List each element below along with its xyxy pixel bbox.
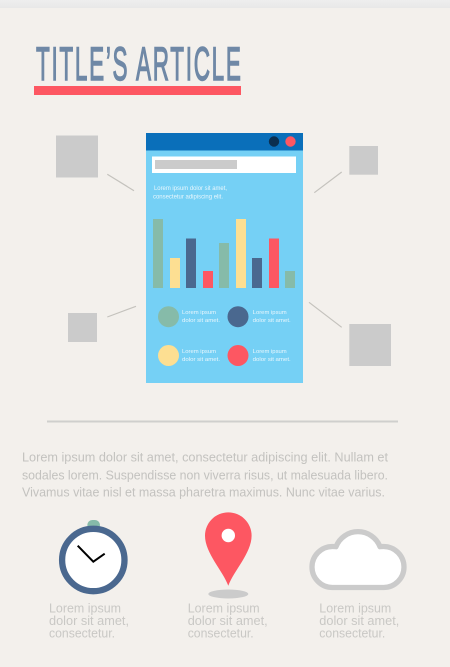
window intro text (153, 186, 227, 200)
callout: top left (56, 136, 134, 191)
caption: cloud: dolor sit amet, (319, 613, 399, 628)
callout: bottom left (68, 306, 136, 342)
legend: Lorem ipsum (182, 310, 216, 316)
legend: dolor sit amet. (253, 357, 291, 363)
icon: stopwatch (62, 520, 124, 591)
legend: Lorem ipsum (182, 349, 216, 355)
legend: dolor sit amet. (182, 357, 221, 363)
caption: map pin: consectetur. (188, 626, 254, 641)
window header bar (146, 133, 303, 150)
legend: dolor sit amet. (253, 318, 291, 324)
caption: stopwatch: Lorem ipsum (49, 601, 121, 616)
caption: map pin: dolor sit amet, (188, 613, 268, 628)
icon: map pin (205, 512, 252, 598)
caption: cloud: Lorem ipsum (319, 601, 391, 616)
legend (158, 306, 291, 366)
legend: Lorem ipsum (253, 310, 287, 316)
caption: map pin: Lorem ipsum (188, 601, 260, 616)
search field (152, 156, 296, 173)
caption: map pin (188, 601, 268, 641)
caption: cloud (319, 601, 399, 641)
caption: cloud: consectetur. (319, 626, 385, 641)
window intro text: Lorem ipsum dolor sit amet, (154, 186, 227, 192)
body paragraph: Lorem ipsum dolor sit amet, consectetur adipiscing elit. Nullam et (22, 450, 388, 465)
legend: Lorem ipsum (253, 349, 287, 355)
caption: stopwatch (49, 601, 129, 641)
window intro text: consectetur adipiscing elit. (153, 194, 223, 200)
body paragraph: Vivamus vitae nisl et massa pharetra maximus. Nunc vitae varius. (22, 485, 385, 500)
callout: top right (314, 146, 378, 193)
body paragraph: sodales lorem. Suspendisse non viverra risus, ut malesuada libero. (22, 467, 388, 482)
panel: app window mockup (146, 133, 303, 383)
body paragraph (22, 450, 388, 500)
callout: bottom right (309, 302, 391, 366)
title: TITLE’S ARTICLE (36, 38, 241, 90)
icon: cloud (312, 532, 404, 588)
legend: dolor sit amet. (182, 318, 221, 324)
caption: stopwatch: consectetur. (49, 626, 115, 641)
caption: stopwatch: dolor sit amet, (49, 613, 129, 628)
bar chart (153, 219, 295, 288)
